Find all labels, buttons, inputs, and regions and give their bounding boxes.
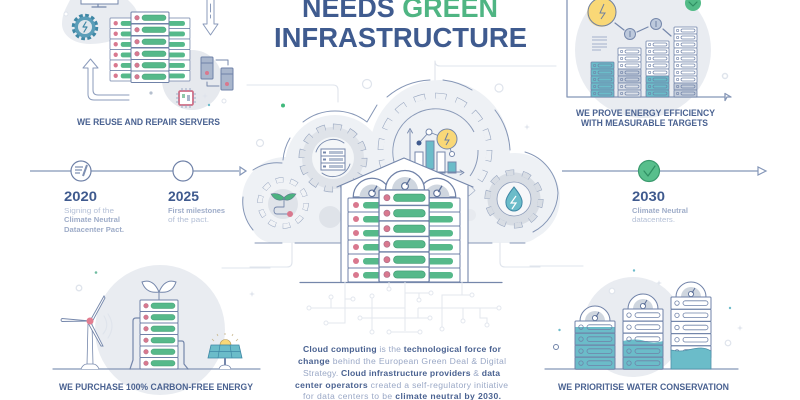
grey circle	[95, 265, 225, 395]
year 2020: 2020	[64, 189, 97, 204]
paragraph: Strategy. Cloud infrastructure providers & data	[303, 368, 500, 378]
description 2025: First milestones	[168, 206, 225, 215]
title: INFRASTRUCTURE	[274, 22, 527, 53]
grey circle	[583, 277, 683, 377]
rack C	[671, 282, 711, 369]
lower light rounded lines	[250, 243, 540, 267]
description 2030: Climate Neutral	[632, 206, 688, 215]
icon: chip	[176, 88, 196, 108]
server rack back	[110, 18, 190, 81]
document lines	[592, 37, 607, 50]
paragraph: change behind the European Green Deal & Digital	[298, 356, 506, 366]
icon: wind turbine	[61, 296, 112, 369]
icon: mini servers	[201, 57, 233, 90]
icon: server rack with leaves	[130, 281, 188, 369]
cloud blob	[62, 0, 137, 44]
panel: carbon-free energy	[53, 265, 270, 395]
caption: WITH MEASURABLE TARGETS	[581, 118, 708, 128]
timeline left	[30, 161, 246, 234]
ground	[545, 368, 738, 370]
server rack back	[348, 198, 460, 282]
chart in gear	[408, 128, 464, 175]
small ring	[722, 74, 728, 78]
arrow up	[83, 59, 129, 100]
decorative dots	[554, 269, 743, 350]
description 2030: datacenters.	[632, 215, 675, 224]
icon: 2030 check	[638, 160, 660, 182]
central cloud	[242, 80, 560, 282]
server rack front	[131, 12, 169, 82]
year 2030: 2030	[632, 189, 665, 204]
gear: server cycle	[302, 127, 364, 189]
grey circle	[162, 50, 222, 110]
timeline right	[562, 160, 766, 224]
icon: bolt circle	[587, 0, 616, 27]
description 2025	[168, 206, 225, 224]
gear: water	[488, 172, 540, 226]
timeline line	[562, 167, 766, 175]
caption: WE PURCHASE 100% CARBON-FREE ENERGY	[59, 382, 253, 392]
grey circle	[575, 0, 711, 118]
cloud outline arcs	[243, 80, 558, 243]
decorative dots	[64, 12, 226, 106]
gauges	[353, 170, 456, 197]
description 2025: of the pact.	[168, 215, 209, 224]
cloud body	[242, 80, 560, 243]
decorative dots	[76, 271, 255, 297]
icon: green check	[685, 0, 701, 11]
circuit lines	[307, 282, 501, 334]
chart axes	[567, 0, 731, 100]
panel: energy efficiency	[567, 0, 731, 128]
house	[337, 158, 473, 282]
icon: monitor	[81, 0, 118, 7]
caption: WE PRIORITISE WATER CONSERVATION	[558, 382, 729, 392]
gear: big chart	[381, 96, 489, 204]
paragraph: Cloud computing is the technological force for	[303, 344, 501, 354]
server rack front	[379, 190, 429, 282]
title	[274, 0, 527, 53]
timeline line	[30, 167, 246, 175]
decorative dots	[256, 80, 530, 228]
connector	[530, 265, 583, 267]
panel: water conservation	[530, 266, 743, 392]
description 2020: Signing of the	[64, 206, 114, 215]
gear: sprout	[260, 180, 306, 226]
base line	[300, 282, 502, 284]
description 2020	[64, 206, 124, 234]
rack A	[575, 306, 615, 369]
caption: WE REUSE AND REPAIR SERVERS	[77, 117, 220, 127]
icon: 2020 pact	[71, 161, 91, 181]
connector lines	[247, 61, 556, 102]
icon: 2025 circle	[173, 161, 193, 181]
year 2025: 2025	[168, 189, 199, 204]
icon: solar panel	[208, 333, 242, 369]
caption: WE PROVE ENERGY EFFICIENCY	[576, 108, 715, 118]
ground	[53, 368, 260, 370]
description 2020: Climate Neutral	[64, 215, 120, 224]
description 2020: Datacenter Pact.	[64, 225, 124, 234]
panel: reuse and repair servers	[62, 0, 233, 127]
rack B	[623, 294, 663, 369]
bar chart of racks	[591, 27, 697, 97]
arrow down	[203, 0, 218, 35]
connector	[222, 267, 270, 269]
icon: recycle gear	[74, 16, 96, 38]
description 2030	[632, 206, 688, 224]
paragraph: center operators created a self-regulatory initiative	[295, 380, 508, 390]
connector lines	[615, 23, 671, 36]
icon: coins	[624, 18, 662, 40]
